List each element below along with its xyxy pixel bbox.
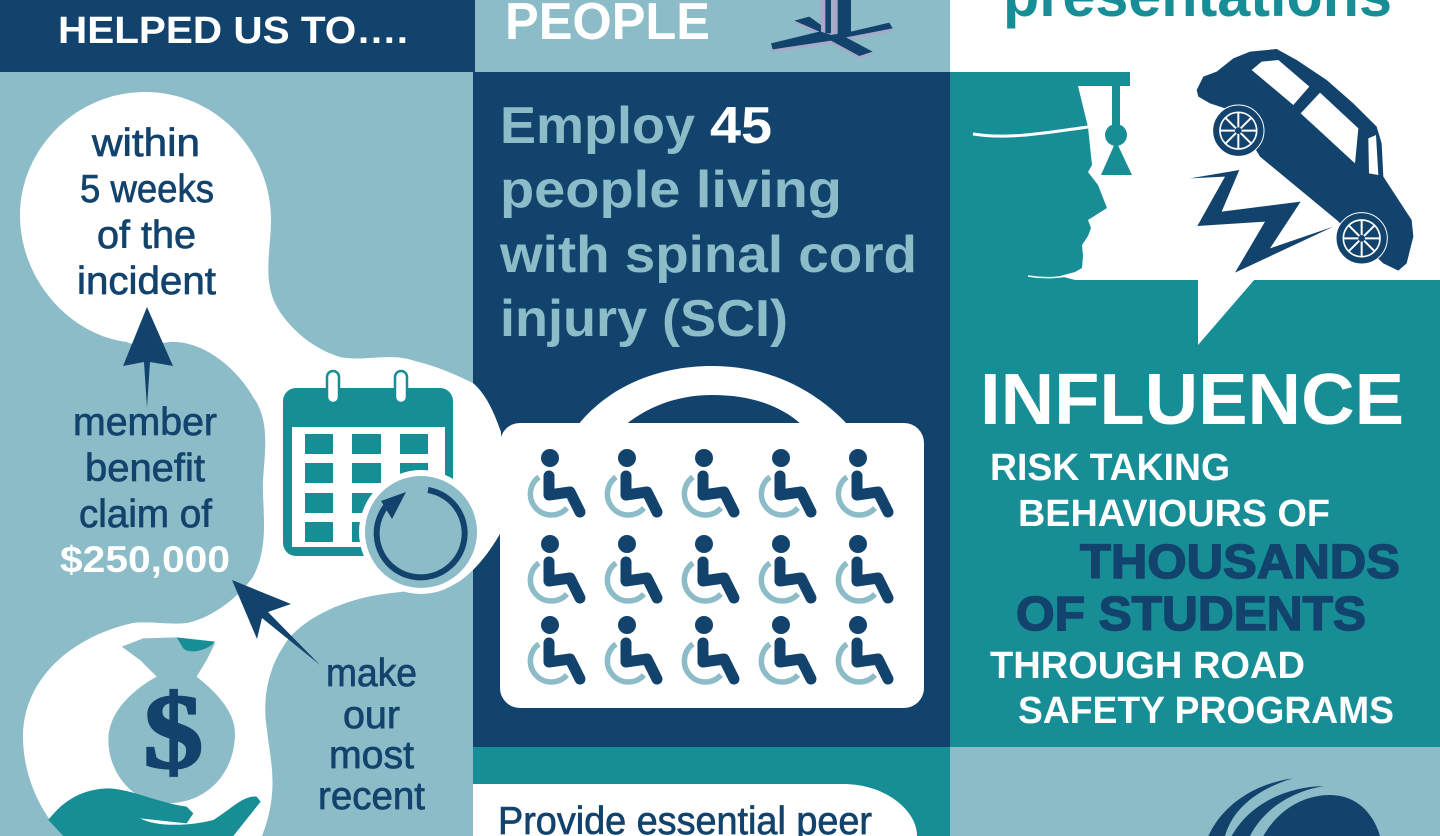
text: employ 45 people: 45 [710, 97, 772, 155]
arrow: diagonal to claim [232, 580, 320, 665]
icon: stand base [771, 0, 893, 59]
text: make our most recent: most [329, 734, 414, 777]
text: member benefit claim of $250,000: member [73, 401, 217, 444]
text: make our most recent: recent [318, 775, 425, 818]
panel: middle column [473, 0, 950, 836]
panel: employ [473, 72, 950, 747]
heading: influence: INFLUENCE [980, 360, 1404, 440]
icon: crashing car [1190, 49, 1413, 273]
text: within 5 weeks of the incident: incident [77, 260, 216, 303]
text: employ 45 people: injury (SCI) [500, 290, 788, 348]
text: within 5 weeks of the incident: within [91, 122, 200, 165]
icon: graduate head [950, 72, 1132, 280]
icon: money bag in hand [48, 637, 261, 836]
white flow blob [20, 92, 501, 836]
speech bubble tail [1198, 279, 1255, 345]
icon: head with swooshes [1208, 778, 1380, 836]
icon: renew cycle [359, 470, 483, 594]
header: helped us to: HELPED US TO…. [58, 10, 408, 52]
text: make our most recent [318, 652, 425, 818]
header: people [475, 0, 950, 72]
text: risk taking behaviours of thousands of students: THOUSANDS [1080, 536, 1400, 589]
header: helped us to [0, 0, 475, 72]
text: employ 45 people: with spinal cord [499, 226, 917, 284]
text: employ 45 people: Employ [500, 97, 695, 155]
text: risk taking behaviours of thousands of students: THROUGH ROAD [990, 645, 1305, 687]
text: member benefit claim of $250,000: claim of [79, 493, 212, 536]
text: member benefit claim of $250,000 [60, 401, 230, 580]
text: make our most recent: make [326, 652, 417, 695]
text: employ 45 people [499, 97, 917, 348]
arrow: up to incident [123, 307, 173, 408]
text: member benefit claim of $250,000: $250,000 [60, 539, 230, 580]
text: risk taking behaviours of thousands of students: SAFETY PROGRAMS [1018, 690, 1394, 732]
panel: teal influence background [950, 280, 1440, 747]
text: within 5 weeks of the incident: of the [97, 214, 196, 257]
panel: peer support [473, 747, 950, 836]
text: risk taking behaviours of thousands of students: BEHAVIOURS OF [1018, 493, 1330, 535]
text: make our most recent: our [343, 694, 400, 737]
text: risk taking behaviours of thousands of students: OF STUDENTS [1016, 588, 1366, 641]
panel: bottom light [950, 747, 1440, 836]
text: member benefit claim of $250,000: benefit [85, 447, 205, 490]
icon: calendar [283, 371, 453, 556]
icons: wheelchair users [530, 449, 888, 682]
text: within 5 weeks of the incident [77, 122, 216, 303]
text: employ 45 people: people living [500, 161, 842, 219]
panel: left column [0, 0, 501, 836]
icon: briefcase [500, 366, 924, 708]
text: risk taking behaviours of thousands of students: RISK TAKING [990, 447, 1230, 489]
text: risk taking behaviours of thousands of students [990, 447, 1400, 732]
text: within 5 weeks of the incident: 5 weeks [80, 168, 214, 211]
icon: money bag in hand: $ [143, 673, 203, 791]
panel: right column [950, 0, 1440, 836]
